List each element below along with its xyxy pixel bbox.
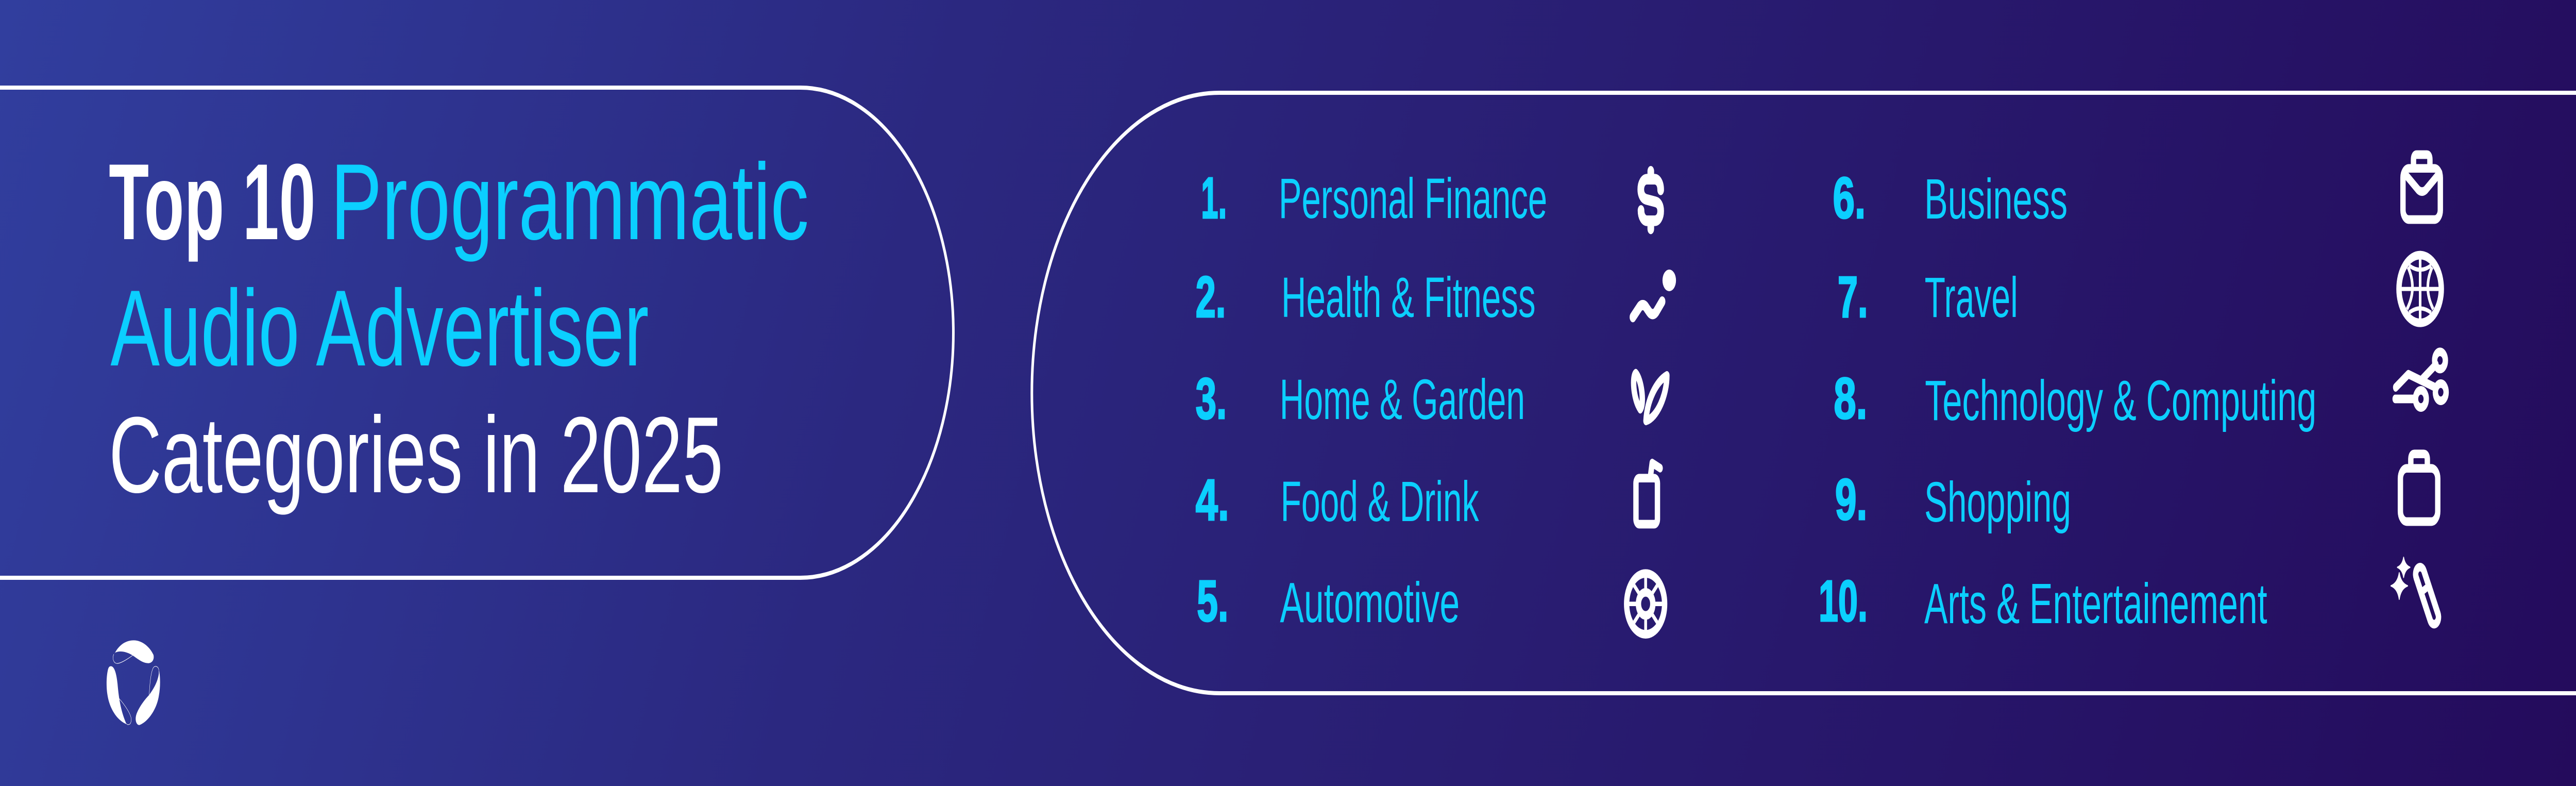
label: Business: Business: [1924, 168, 2067, 231]
icon: globe: [2399, 255, 2442, 323]
list item 9: [1835, 454, 2438, 534]
title: Audio Advertiser: Audio Advertiser: [110, 268, 649, 389]
title: Categories in 2025: Categories in 2025: [109, 395, 723, 516]
icon: fitness activity: [1633, 270, 1676, 317]
number 7: 7.: [1838, 264, 1868, 329]
number 9: 9.: [1835, 467, 1867, 532]
icon: briefcase with envelope: [2403, 155, 2441, 220]
list item 1: [1201, 165, 1660, 230]
number 6: 6.: [1833, 165, 1866, 230]
label: Health & Fitness: Health & Fitness: [1281, 266, 1536, 329]
icon: wheel: [1626, 574, 1665, 634]
panel: category list outline: [1032, 93, 2576, 693]
icon: shopping bag: [2400, 454, 2438, 522]
list item 6: [1833, 155, 2441, 231]
label: Travel: Travel: [1925, 266, 2018, 329]
list item 10: [1819, 557, 2434, 636]
number 4: 4.: [1196, 467, 1229, 532]
number 2: 2.: [1196, 264, 1226, 329]
number 3: 3.: [1196, 366, 1227, 431]
icon: logo: [107, 640, 160, 725]
number 8: 8.: [1834, 366, 1867, 431]
icon: leaves: [1634, 373, 1667, 421]
number 10: 10.: [1819, 568, 1868, 633]
icon: dollar sign: [1641, 171, 1660, 229]
heading: title: [109, 142, 809, 516]
title: Programmatic: Programmatic: [331, 142, 809, 263]
label: Food & Drink: Food & Drink: [1281, 471, 1479, 533]
label: Personal Finance: Personal Finance: [1279, 168, 1547, 230]
label: Shopping: Shopping: [1924, 471, 2071, 534]
number 1: 1.: [1201, 165, 1227, 230]
number 5: 5.: [1197, 568, 1228, 633]
list item 7: [1838, 255, 2442, 329]
list item 4: [1196, 463, 1660, 533]
panel: title outline: [0, 88, 953, 578]
icon: drink cup: [1636, 463, 1660, 524]
label: Arts & Entertainement: Arts & Entertainement: [1924, 573, 2267, 636]
label: Technology & Computing: Technology & Computing: [1925, 370, 2316, 432]
label: Home & Garden: Home & Garden: [1280, 369, 1525, 431]
list item 3: [1196, 366, 1667, 431]
title: Top 10: Top 10: [109, 142, 315, 263]
list item 2: [1196, 264, 1676, 329]
list item 5: [1197, 568, 1665, 634]
icon: magic wand and sparkles: [2391, 557, 2434, 617]
icon: network nodes: [2395, 352, 2446, 408]
label: Automotive: Automotive: [1280, 572, 1460, 634]
list item 8: [1834, 352, 2446, 432]
